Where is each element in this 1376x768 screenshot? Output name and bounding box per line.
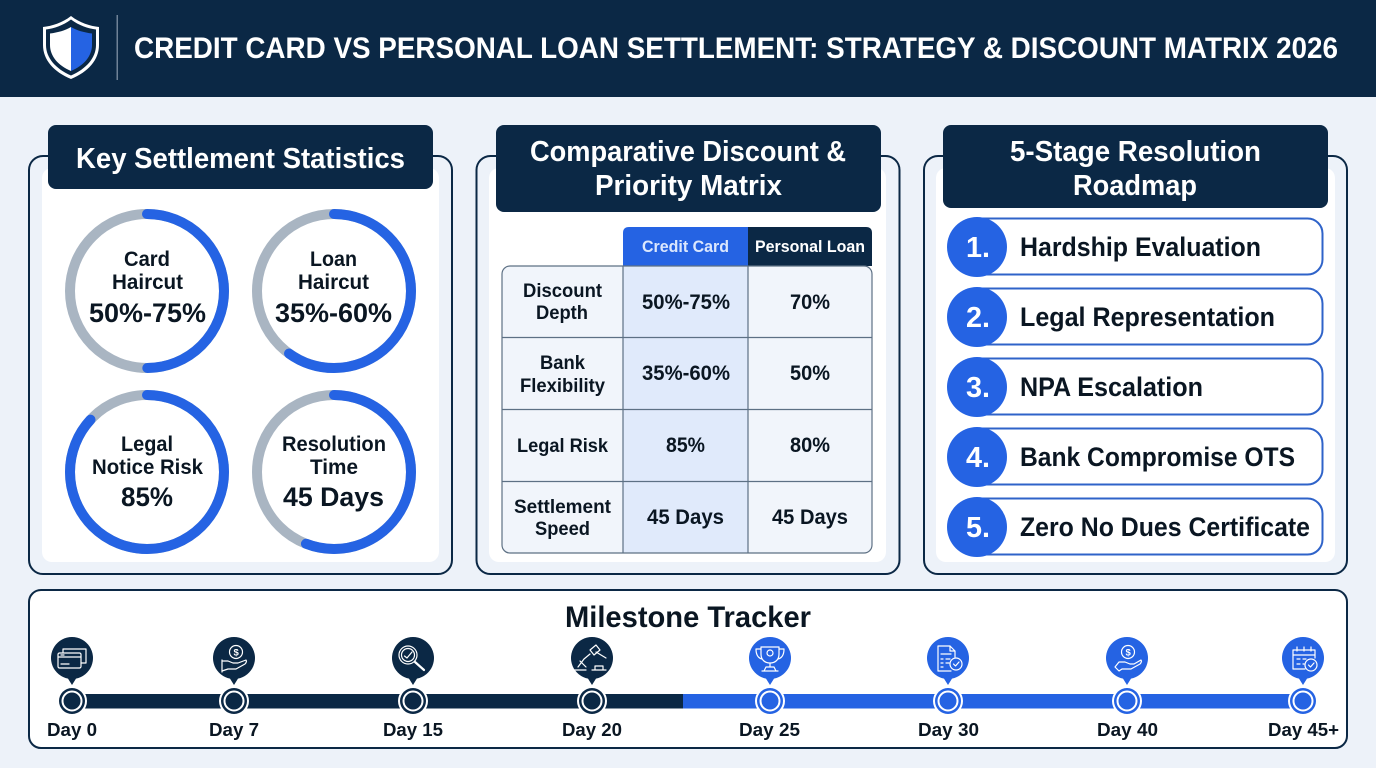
row: discount depth: Depth (536, 302, 588, 324)
icon: shield logo (43, 16, 99, 79)
stat ring: loan haircut: 35%-60% (275, 298, 392, 328)
row: legal risk (517, 434, 830, 457)
row: legal risk: 80% (790, 434, 830, 457)
panel: comparative discount matrix (476, 125, 900, 574)
stat ring: loan haircut (257, 214, 411, 368)
stage 2: Legal Representation (1020, 302, 1275, 332)
stage 5: 5. (966, 512, 990, 544)
stat ring: legal notice risk: Notice Risk (92, 456, 203, 479)
stage 5: Zero No Dues Certificate (1020, 512, 1310, 542)
stage 3: NPA Escalation (1020, 372, 1203, 402)
milestone: day 0 (47, 637, 97, 740)
icon: trophy (756, 647, 784, 671)
milestone: day 20: Day 20 (562, 719, 622, 740)
stat ring: card haircut: Haircut (112, 271, 183, 294)
stat ring: legal notice risk (70, 395, 224, 549)
milestone: day 15: Day 15 (383, 719, 443, 740)
icon: calendar with check (1293, 647, 1317, 671)
milestone: day 40: Day 40 (1097, 719, 1158, 740)
milestone: day 45+: Day 45+ (1268, 719, 1339, 740)
heading: comparative discount and priority matrix: Priority Matrix (595, 170, 782, 202)
stat ring: card haircut: Card (124, 248, 170, 271)
milestone: day 30 (918, 637, 979, 740)
milestone: day 25 (739, 637, 800, 740)
stage 2 (947, 287, 1322, 347)
milestone: day 7: Day 7 (209, 719, 259, 740)
row: discount depth: 70% (790, 291, 830, 314)
row: settlement speed: 45 Days (647, 506, 724, 529)
stage 1 (947, 217, 1322, 277)
row: bank flexibility (520, 352, 830, 397)
row: bank flexibility: Bank (540, 352, 585, 374)
column header: credit card: Credit Card (642, 237, 729, 256)
stage 2: 2. (966, 302, 990, 334)
heading: milestone tracker: Milestone Tracker (565, 601, 811, 634)
row: legal risk: 85% (666, 434, 705, 457)
stage 1: Hardship Evaluation (1020, 232, 1261, 262)
icon: document with check (938, 646, 962, 671)
stat ring: card haircut: 50%-75% (89, 298, 206, 328)
panel: key settlement statistics (29, 125, 452, 574)
row: settlement speed: 45 Days (772, 506, 848, 529)
stage 5 (947, 497, 1322, 557)
icon: gavel (574, 645, 606, 670)
column header: personal loan (748, 227, 872, 266)
column header: personal loan: Personal Loan (755, 237, 865, 256)
stage 3: 3. (966, 372, 990, 404)
heading: comparative discount and priority matrix (496, 125, 881, 212)
stage 3 (947, 357, 1322, 417)
stat ring: card haircut (70, 214, 224, 368)
stage 4: 4. (966, 442, 990, 474)
column header: credit card (623, 227, 748, 266)
milestone: day 30: Day 30 (918, 719, 979, 740)
row: bank flexibility: 35%-60% (642, 362, 730, 385)
row: legal risk: Legal Risk (517, 435, 608, 457)
heading: comparative discount and priority matrix: Comparative Discount & (530, 136, 846, 168)
comparison table (502, 227, 872, 553)
milestone: day 40 (1097, 637, 1158, 740)
stat ring: loan haircut: Loan (310, 248, 357, 271)
milestone: day 40: $ (1126, 648, 1132, 658)
milestone: day 7 (209, 637, 259, 740)
row: discount depth: 50%-75% (642, 291, 730, 314)
row: discount depth: Discount (523, 280, 602, 302)
stat ring: legal notice risk: Legal (121, 433, 173, 456)
row: settlement speed (514, 496, 848, 540)
row: discount depth (523, 280, 830, 324)
stat ring: resolution time (257, 395, 411, 549)
milestone: day 20 (562, 637, 622, 740)
milestone: day 25: Day 25 (739, 719, 800, 740)
milestone: day 0: Day 0 (47, 719, 97, 740)
milestone: day 7: $ (234, 648, 240, 658)
heading: 5-stage resolution roadmap (943, 125, 1328, 208)
stat ring: loan haircut: Haircut (298, 271, 369, 294)
row: bank flexibility: Flexibility (520, 375, 605, 397)
stat ring: legal notice risk: 85% (121, 482, 173, 512)
stage 4: Bank Compromise OTS (1020, 442, 1295, 472)
stage 1: 1. (966, 232, 990, 264)
heading: 5-stage resolution roadmap: Roadmap (1073, 170, 1197, 202)
stat ring: resolution time: Time (310, 456, 358, 479)
timeline bar (72, 694, 1303, 708)
icon: hand with coin (222, 646, 246, 672)
header banner (0, 0, 1376, 97)
panel: resolution roadmap (924, 125, 1347, 574)
milestone: day 15 (383, 637, 443, 740)
row: settlement speed: Settlement (514, 496, 611, 518)
row: bank flexibility: 50% (790, 362, 830, 385)
icon: credit cards (58, 649, 86, 668)
milestone: day 45+ (1268, 637, 1339, 740)
row: settlement speed: Speed (535, 518, 590, 540)
stage 4 (947, 427, 1322, 487)
heading: 5-stage resolution roadmap: 5-Stage Resolution (1010, 136, 1261, 168)
heading: key settlement statistics: Key Settlement Statistics (76, 143, 405, 175)
stat ring: resolution time: 45 Days (283, 482, 384, 512)
stat ring: resolution time: Resolution (282, 433, 386, 456)
panel: milestone tracker (29, 590, 1347, 748)
heading: key settlement statistics (48, 125, 433, 189)
icon: magnifier with check (399, 646, 424, 670)
icon: hand with coin (1115, 646, 1141, 671)
